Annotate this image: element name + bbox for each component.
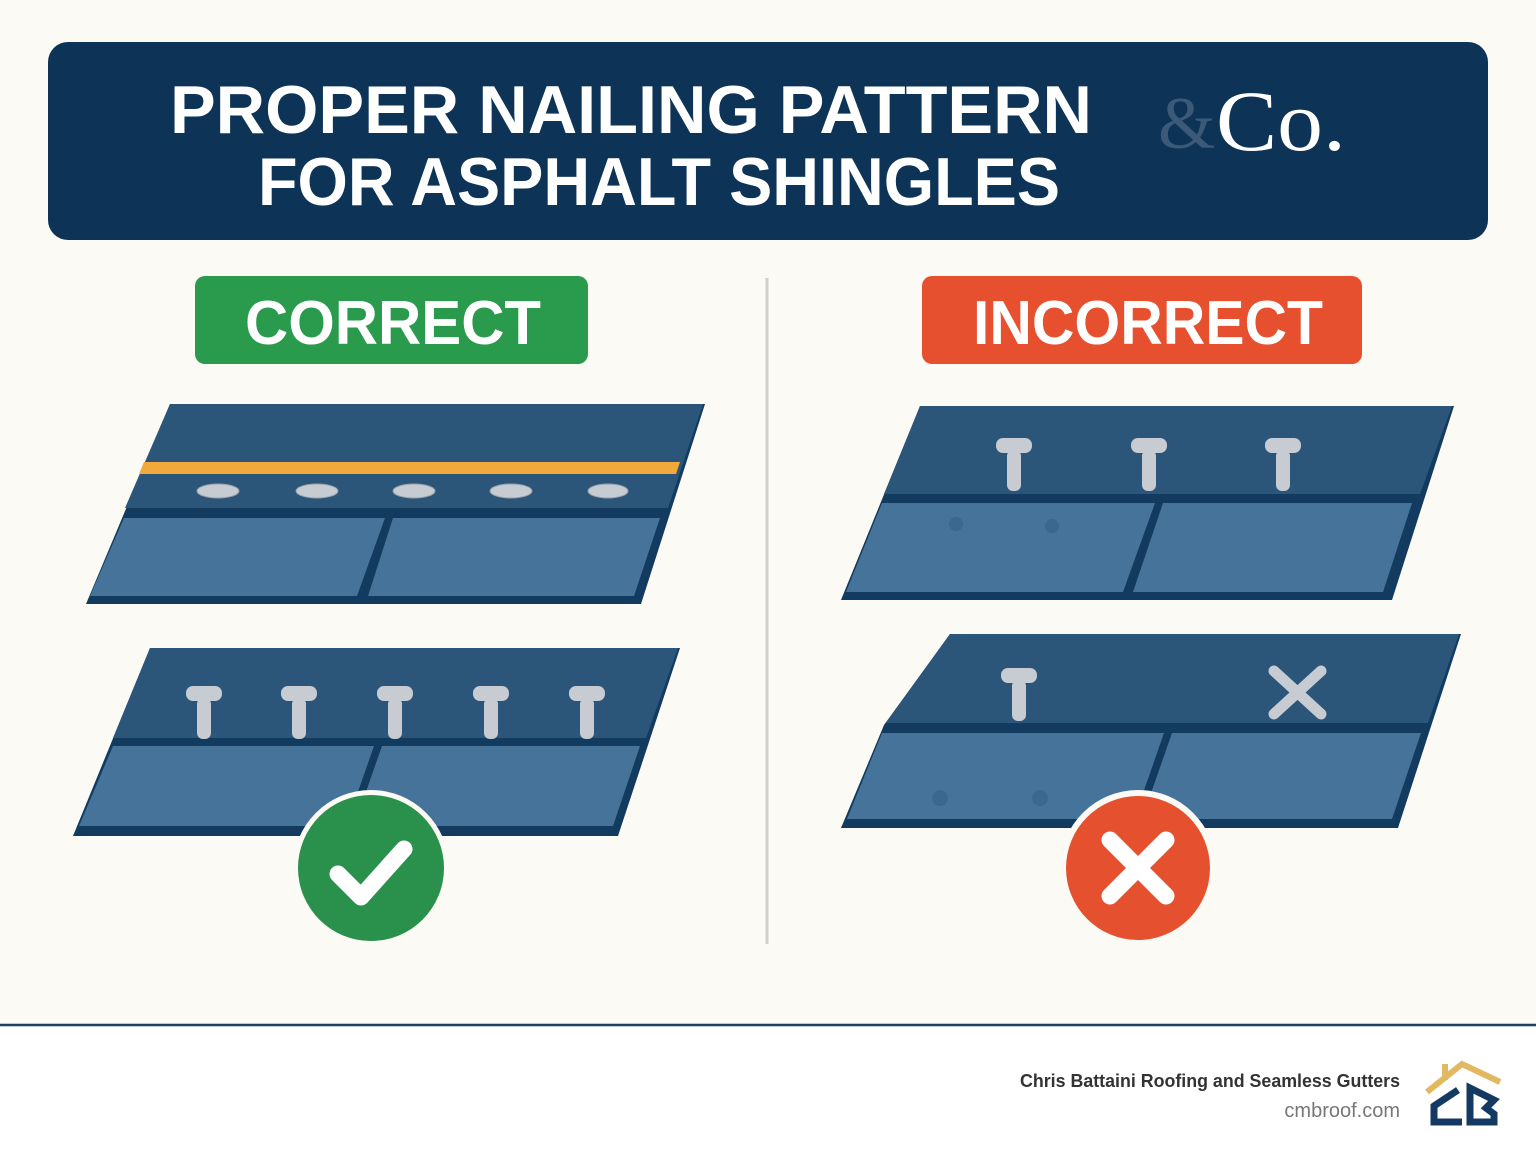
shingle: incorrect sparse nails bbox=[841, 406, 1454, 600]
nails: upright bbox=[186, 686, 605, 739]
logo: &Co.: Co. bbox=[1216, 73, 1346, 169]
footer text: Chris Battaini Roofing and Seamless Gutters bbox=[1020, 1071, 1400, 1091]
title: PROPER NAILING PATTERN bbox=[170, 72, 1092, 148]
badge: CORRECT bbox=[195, 276, 588, 364]
footer logo: CB house bbox=[1427, 1064, 1500, 1122]
title: FOR ASPHALT SHINGLES bbox=[258, 144, 1060, 220]
shingle: correct with nails bbox=[73, 648, 680, 836]
logo: &Co. bbox=[1158, 73, 1346, 169]
icon: missing nail X bbox=[1274, 671, 1321, 714]
logo: &Co.: & bbox=[1158, 83, 1216, 165]
title bbox=[170, 72, 1092, 220]
nails: flat heads bbox=[197, 484, 628, 498]
nailing line bbox=[139, 462, 680, 474]
badge: CORRECT: CORRECT bbox=[245, 289, 541, 358]
shingle: correct with nailing line bbox=[86, 404, 705, 604]
icon: check circle bbox=[293, 790, 449, 946]
shingle: incorrect missing nail bbox=[841, 634, 1461, 828]
footer text: cmbroof.com bbox=[1284, 1100, 1400, 1122]
header banner bbox=[48, 42, 1488, 240]
badge: INCORRECT bbox=[922, 276, 1362, 364]
icon: X circle bbox=[1060, 790, 1216, 946]
divider bbox=[766, 278, 768, 944]
footer text bbox=[1020, 1071, 1400, 1122]
badge: INCORRECT: INCORRECT bbox=[973, 289, 1323, 358]
footer background bbox=[0, 1025, 1536, 1154]
